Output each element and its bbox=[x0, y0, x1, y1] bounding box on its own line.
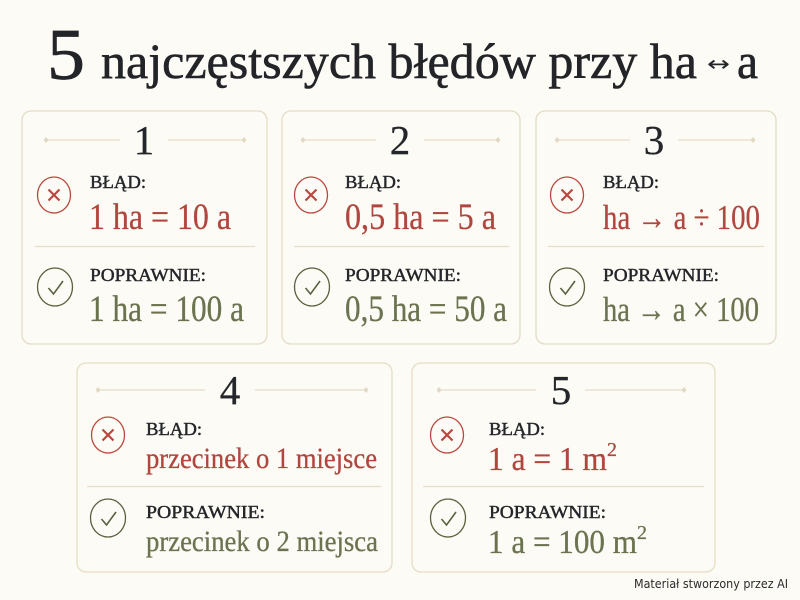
icon: correct check bbox=[550, 268, 584, 306]
icon: error cross bbox=[294, 177, 328, 213]
title: a bbox=[737, 33, 758, 89]
icon: correct check bbox=[430, 499, 466, 537]
correct label: POPRAWNIE: bbox=[603, 265, 719, 285]
icon: correct check bbox=[90, 499, 126, 537]
correct label: POPRAWNIE: bbox=[90, 265, 206, 285]
error label: BŁĄD: bbox=[345, 172, 401, 192]
icon: error cross bbox=[38, 177, 70, 213]
number 3: 3 bbox=[644, 117, 664, 163]
error label: BŁĄD: bbox=[90, 172, 146, 192]
correct label: POPRAWNIE: bbox=[146, 502, 265, 522]
correct value: przecinek o 2 miejsca bbox=[146, 525, 378, 558]
panel: mistake 5 bbox=[412, 363, 715, 572]
error label: BŁĄD: bbox=[603, 172, 659, 192]
title: najczęstszych błędów przy ha bbox=[101, 33, 697, 89]
error value: 1 a = 1 m bbox=[488, 441, 607, 478]
number 1: 1 bbox=[134, 117, 154, 163]
icon: correct check bbox=[38, 268, 72, 306]
correct value: 2 bbox=[637, 522, 647, 544]
error label: BŁĄD: bbox=[146, 419, 202, 439]
number 2: 2 bbox=[390, 117, 410, 163]
error value: 1 ha = 10 a bbox=[89, 197, 231, 238]
title bbox=[47, 14, 758, 95]
error value: przecinek o 1 miejsce bbox=[146, 442, 377, 475]
icon: error cross bbox=[92, 417, 124, 453]
error label: BŁĄD: bbox=[489, 419, 545, 439]
title: ↔ bbox=[707, 52, 730, 76]
correct value: 0,5 ha = 50 a bbox=[345, 289, 507, 330]
title: 5 bbox=[47, 14, 85, 95]
correct label: POPRAWNIE: bbox=[345, 265, 461, 285]
error value: 0,5 ha = 5 a bbox=[345, 197, 496, 238]
correct label: POPRAWNIE: bbox=[489, 502, 606, 522]
panel: mistake 3 bbox=[536, 111, 776, 344]
panel: mistake 1 bbox=[22, 111, 267, 344]
icon: error cross bbox=[430, 417, 464, 453]
correct value: 1 a = 100 m bbox=[488, 524, 637, 561]
correct value: ha → a × 100 bbox=[603, 290, 759, 329]
number 4: 4 bbox=[220, 367, 240, 413]
correct value: 1 ha = 100 a bbox=[89, 289, 244, 330]
footer note: Materiał stworzony przez AI bbox=[634, 577, 788, 591]
panel: mistake 4 bbox=[77, 363, 392, 572]
icon: error cross bbox=[550, 177, 584, 213]
icon: correct check bbox=[294, 268, 330, 306]
error value: ha → a ÷ 100 bbox=[603, 198, 760, 237]
error value: 2 bbox=[607, 439, 617, 461]
number 5: 5 bbox=[551, 367, 571, 413]
panel: mistake 2 bbox=[282, 111, 520, 344]
